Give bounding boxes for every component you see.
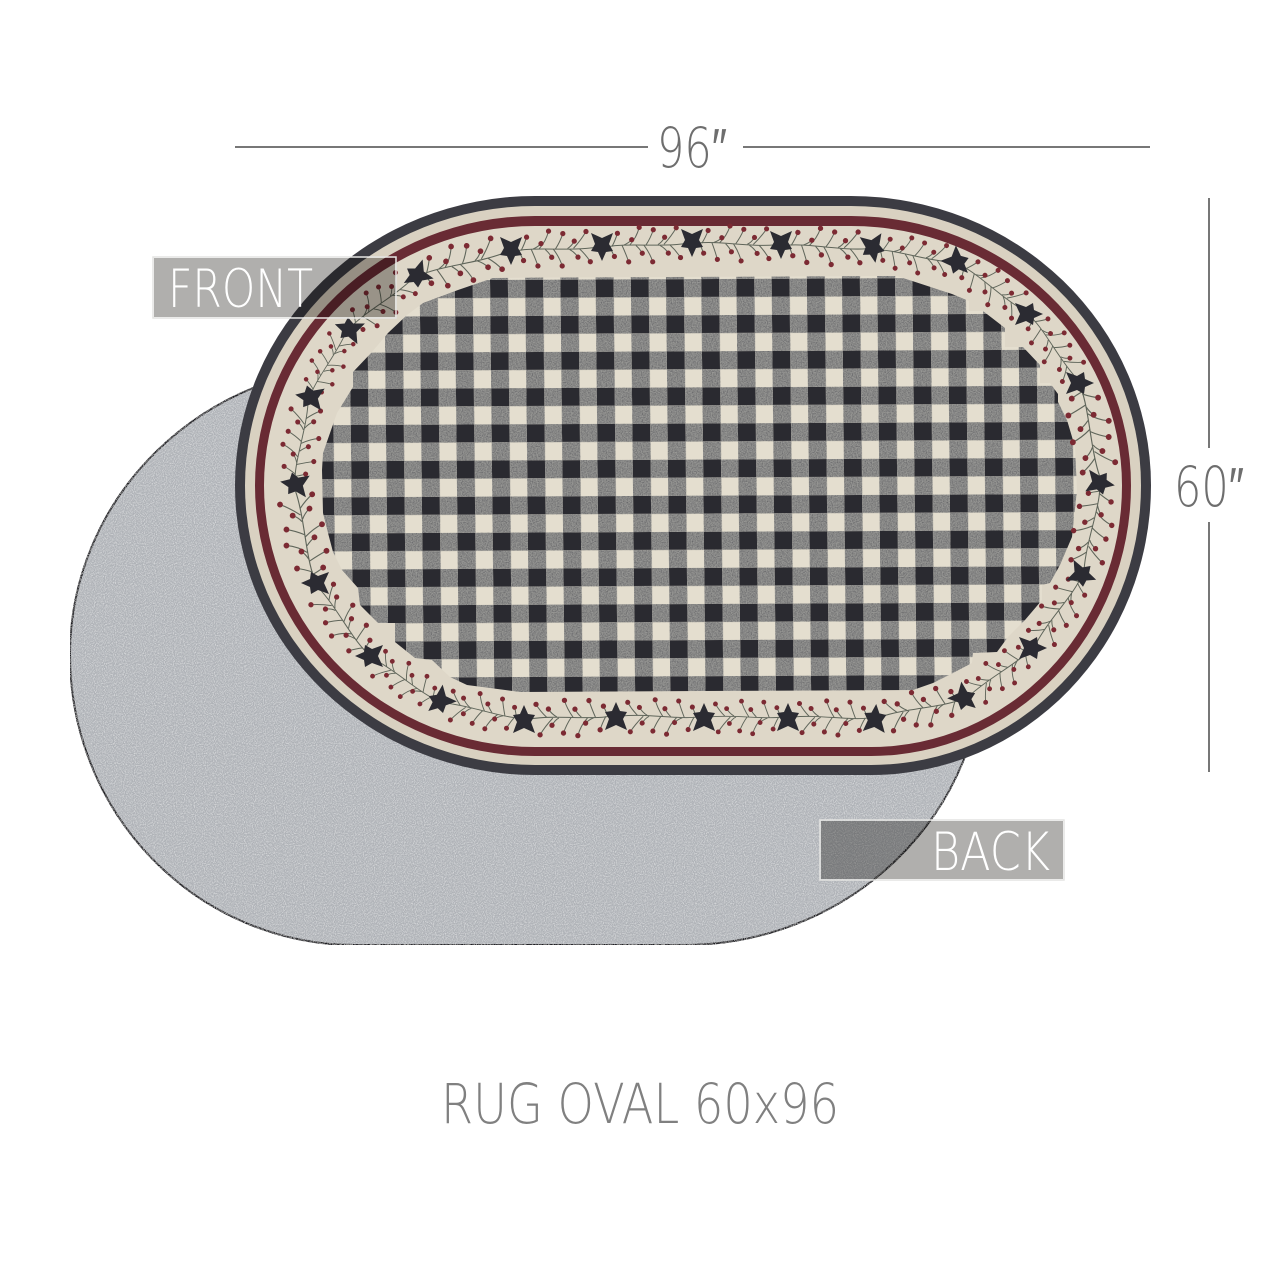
outer dark band xyxy=(235,196,1151,775)
cream border xyxy=(245,206,1141,765)
caption: RUG OVAL 60x96 xyxy=(441,1072,839,1136)
star ring xyxy=(278,229,1117,733)
red stripe xyxy=(255,216,1131,756)
front of rug xyxy=(235,196,1151,775)
FRONT label: FRONT xyxy=(168,259,313,320)
gingham check field xyxy=(322,276,1076,692)
width dimension: 96 inches: 96″ xyxy=(657,116,727,180)
back of rug xyxy=(70,365,984,945)
BACK label: BACK xyxy=(931,822,1050,883)
inner cream band xyxy=(264,226,1122,747)
BACK label xyxy=(820,820,1064,883)
height dimension: 60 inches: 60″ xyxy=(1174,455,1244,519)
berry vines xyxy=(273,223,1122,740)
